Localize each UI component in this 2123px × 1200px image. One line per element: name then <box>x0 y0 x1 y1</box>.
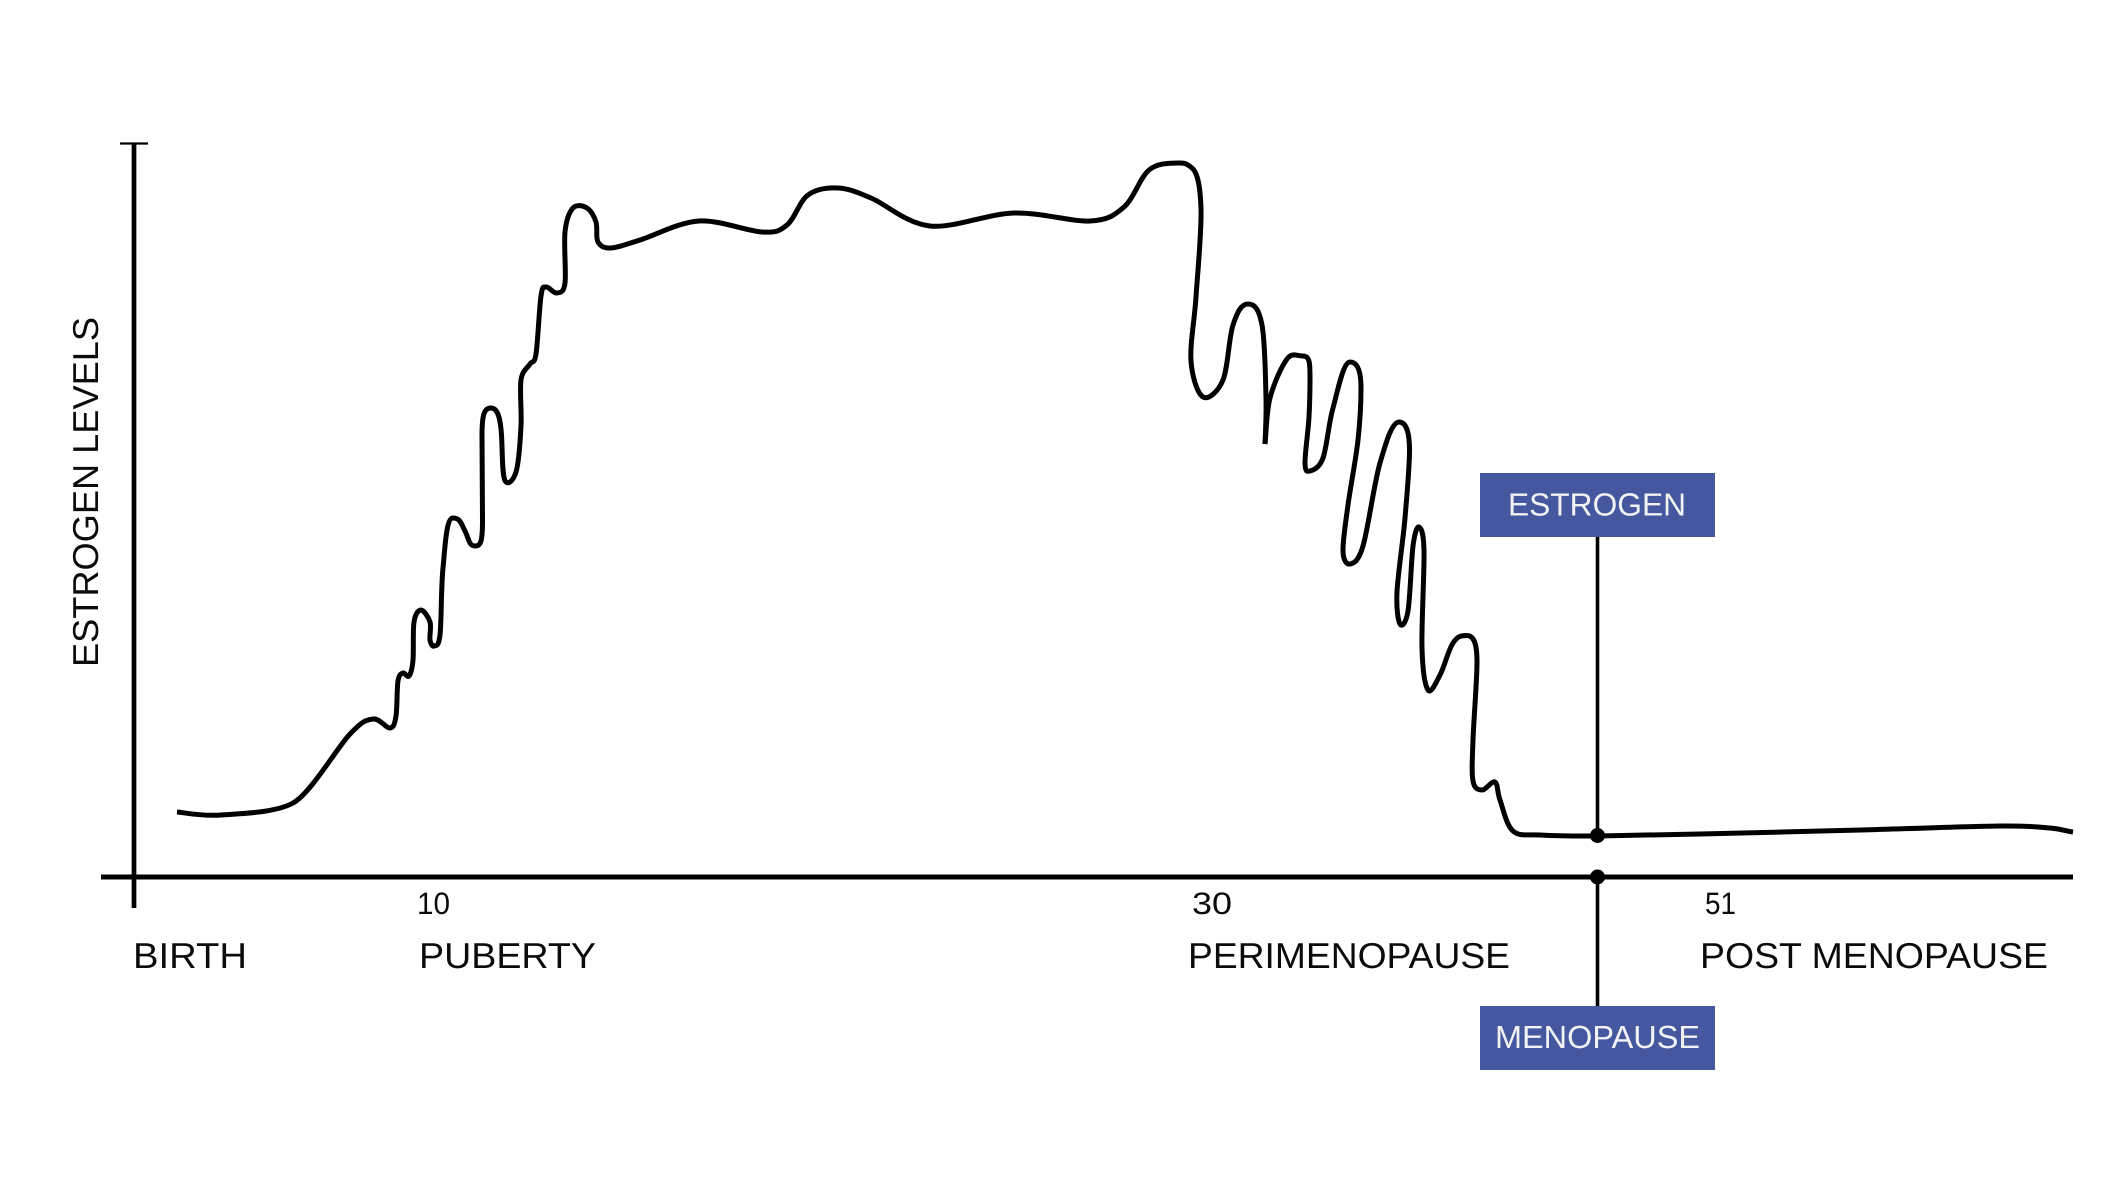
y axis title: ESTROGEN LEVELS <box>65 317 106 667</box>
life stage: post menopause: POST MENOPAUSE <box>1700 935 2048 976</box>
label box: estrogen: ESTROGEN <box>1508 486 1686 522</box>
estrogen curve: rise through puberty and plateau <box>177 163 1266 815</box>
life stage: perimenopause: PERIMENOPAUSE <box>1188 935 1510 976</box>
y axis <box>120 143 148 908</box>
age tick: 30: 30 <box>1192 886 1232 921</box>
life stage: puberty: PUBERTY <box>419 935 596 976</box>
life stage: birth: BIRTH <box>133 935 247 976</box>
label box: menopause <box>1480 1006 1715 1070</box>
marker: menopause on the age axis <box>1590 870 1605 1007</box>
label box: menopause: MENOPAUSE <box>1495 1019 1700 1055</box>
age tick: 51: 51 <box>1705 886 1736 921</box>
marker: estrogen at menopause <box>1590 536 1605 843</box>
label box: estrogen <box>1480 473 1715 537</box>
age tick: 10: 10 <box>417 886 450 921</box>
estrogen curve: perimenopause fluctuations and post-menopause low <box>1265 355 2073 836</box>
x axis <box>101 874 2073 880</box>
